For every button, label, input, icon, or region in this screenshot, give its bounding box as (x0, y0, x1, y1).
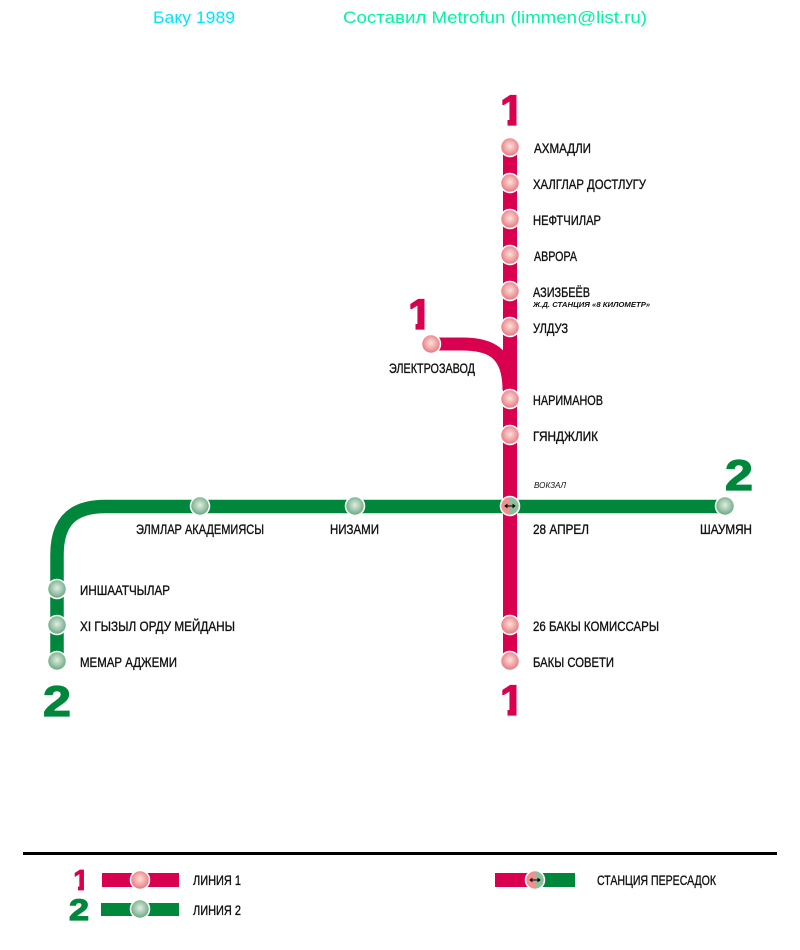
station labels: line 2: НИЗАМИ (330, 521, 379, 537)
station labels: line 1: АВРОРА (534, 248, 577, 264)
legend: line 2 (69, 894, 241, 927)
title: city and year: Баку 1989 (153, 8, 235, 27)
station labels: line 1: АХМАДЛИ (534, 140, 591, 156)
line number: line 2 right: 2 (725, 452, 753, 500)
station labels: line 1: ВОКЗАЛ (534, 480, 566, 490)
line 1 branch track (431, 344, 509, 390)
legend: interchange station (495, 870, 717, 890)
line 1 track (red) (503, 147, 517, 661)
station labels: line 1: Ж.Д. СТАНЦИЯ «8 КИЛОМЕТР» (532, 300, 650, 309)
station labels: line 1: УЛДУЗ (533, 320, 568, 336)
line number: line 1 branch: 1 (408, 291, 432, 339)
legend: line 1: ЛИНИЯ 1 (193, 872, 241, 888)
station labels: line 2: ШАУМЯН (700, 521, 752, 537)
station labels: line 2: ЭЛМЛАР АКАДЕМИЯСЫ (136, 521, 264, 537)
station labels: line 1: НЕФТЧИЛАР (533, 212, 601, 228)
station labels: line 1: 28 АПРЕЛ (533, 521, 589, 537)
line number: line 2 left: 2 (43, 678, 71, 726)
station labels: line 1: 26 БАКЫ КОМИССАРЫ (533, 618, 659, 634)
station labels: line 1: БАКЫ СОВЕТИ (533, 654, 614, 670)
station labels: line 2: ИНШААТЧЫЛАР (80, 582, 170, 598)
stations: line 1 markers (422, 138, 520, 670)
station labels: line 1: АЗИЗБЕЁВ (533, 284, 590, 300)
line 2 track (green) (57, 506, 725, 661)
station labels: line 2: XI ГЫЗЫЛ ОРДУ МЕЙДАНЫ (80, 617, 235, 634)
legend: line 1 (74, 870, 241, 890)
station labels: line 1: ГЯНДЖЛИК (533, 428, 599, 444)
stations: line 2 markers (48, 496, 734, 670)
legend: interchange station: СТАНЦИЯ ПЕРЕСАДОК (597, 872, 717, 888)
station labels: line 2 (80, 521, 752, 670)
legend: line 2: ЛИНИЯ 2 (193, 902, 241, 918)
title: author credit: Составил Metrofun (limmen@list.ru) (343, 8, 647, 27)
station labels: line 1: ХАЛГЛАР ДОСТЛУГУ (533, 176, 646, 192)
station labels: line 2: МЕМАР АДЖЕМИ (80, 654, 177, 670)
station labels: line 1: НАРИМАНОВ (533, 392, 603, 408)
legend: line 2: 2 (69, 894, 89, 927)
legend: line 1: 1 (73, 865, 89, 897)
station labels: line 1 (389, 140, 659, 670)
station labels: line 1: ЭЛЕКТРОЗАВОД (389, 360, 475, 376)
interchange station marker (500, 496, 520, 516)
line number: line 1 bottom: 1 (500, 677, 524, 725)
line number: line 1 top: 1 (500, 87, 524, 135)
